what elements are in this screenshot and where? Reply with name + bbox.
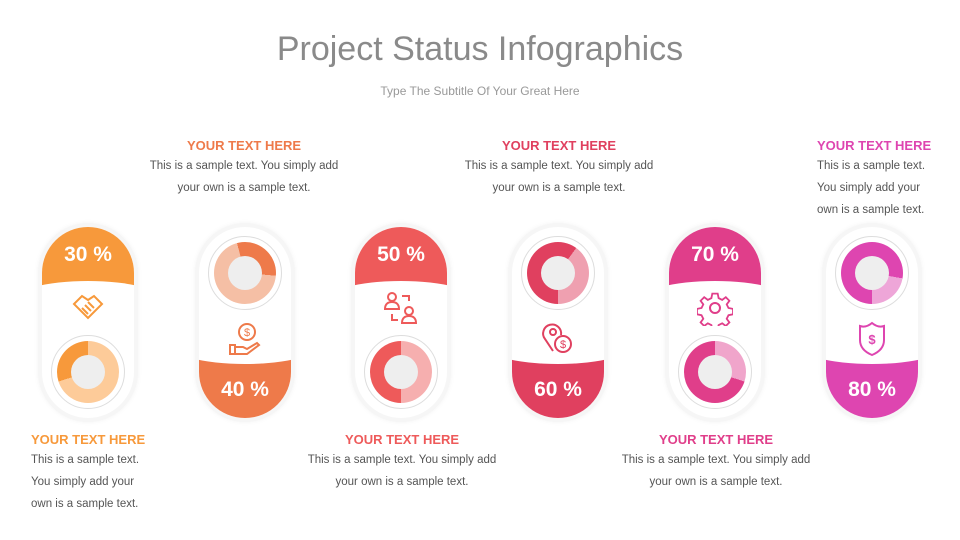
cap 50%: 50 %	[377, 243, 425, 266]
donut 50%	[364, 335, 438, 409]
subtitle: Type The Subtitle Of Your Great Here	[380, 84, 580, 98]
text block 6	[817, 138, 931, 216]
text block 4: your own is a sample text.	[493, 182, 625, 194]
text block 6: YOUR TEXT HERE	[817, 138, 931, 153]
text block 3: This is a sample text. You simply add	[308, 454, 496, 466]
cap 30%	[42, 227, 134, 287]
text block 5: YOUR TEXT HERE	[659, 432, 773, 447]
text block 4: YOUR TEXT HERE	[502, 138, 616, 153]
text block 6: own is a sample text.	[817, 204, 924, 216]
cap 70%: 70 %	[691, 243, 739, 266]
title: Project Status Infographics	[277, 30, 683, 68]
pill 5: 70%	[669, 227, 761, 418]
pill 1: 30%	[42, 227, 134, 418]
text block 4	[465, 138, 653, 194]
text block 5	[622, 432, 810, 488]
icon: shield dollar: $	[868, 332, 876, 347]
donut 70%	[678, 335, 752, 409]
donut 40%	[208, 236, 282, 310]
text block 1: YOUR TEXT HERE	[31, 432, 145, 447]
icon: location money	[542, 324, 572, 353]
text block 4: This is a sample text. You simply add	[465, 160, 653, 172]
text block 5: your own is a sample text.	[650, 476, 782, 488]
text block 3: YOUR TEXT HERE	[345, 432, 459, 447]
text block 1: This is a sample text.	[31, 454, 139, 466]
cap 80%: 80 %	[848, 378, 896, 401]
cap 70%	[669, 227, 761, 287]
pill 4: 60%	[512, 227, 604, 418]
cap 40%: 40 %	[221, 378, 269, 401]
text block 5: This is a sample text. You simply add	[622, 454, 810, 466]
cap 40%	[199, 358, 291, 418]
pill 3: 50%	[355, 227, 447, 418]
cap 60%: 60 %	[534, 378, 582, 401]
icon: money hand	[229, 323, 260, 355]
text block 1	[31, 432, 145, 510]
icon: shield dollar	[859, 322, 885, 356]
text block 2	[150, 138, 338, 194]
icon: gear	[697, 292, 733, 326]
icon: location money: $	[560, 339, 566, 351]
cap 60%	[512, 358, 604, 418]
icon: people exchange	[384, 292, 417, 324]
text block 3: your own is a sample text.	[336, 476, 468, 488]
donut 30%	[51, 335, 125, 409]
pill 2: 40%	[199, 227, 291, 418]
cap 50%	[355, 227, 447, 287]
pill 6: 80%	[826, 227, 918, 418]
text block 1: You simply add your	[31, 476, 134, 488]
text block 6: You simply add your	[817, 182, 920, 194]
text block 6: This is a sample text.	[817, 160, 925, 172]
icon: money hand: $	[244, 327, 250, 339]
cap 30%: 30 %	[64, 243, 112, 266]
text block 1: own is a sample text.	[31, 498, 138, 510]
icon: handshake	[72, 294, 104, 320]
text block 2: your own is a sample text.	[178, 182, 310, 194]
donut 60%	[521, 236, 595, 310]
text block 2: This is a sample text. You simply add	[150, 160, 338, 172]
cap 80%	[826, 358, 918, 418]
donut 80%	[835, 236, 909, 310]
text block 2: YOUR TEXT HERE	[187, 138, 301, 153]
text block 3	[308, 432, 496, 488]
